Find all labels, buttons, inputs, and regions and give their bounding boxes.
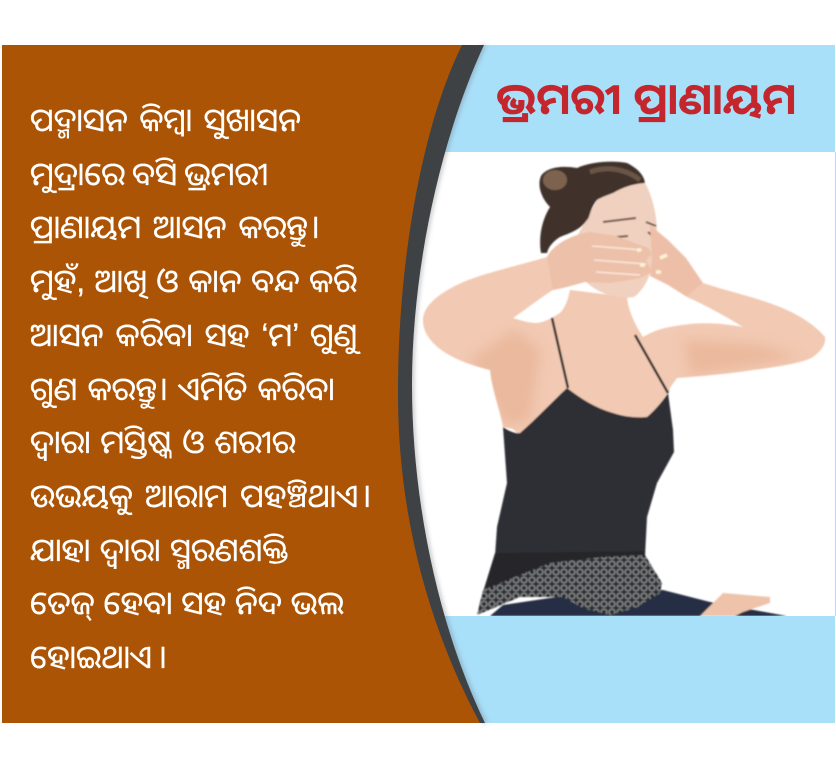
chest behind neckline <box>512 388 670 434</box>
curved dark stripe <box>300 45 485 723</box>
ring and nails <box>637 250 667 272</box>
body text: ପ୍ରାଣାୟମ ଆସନ କରନ୍ତୁ। <box>30 209 320 245</box>
navy leggings <box>490 590 787 616</box>
finger lines <box>592 246 646 275</box>
body text <box>30 102 371 675</box>
body text: ମୁଦ୍ରାରେ ବସି ଭ୍ରମରୀ <box>30 156 268 192</box>
straps <box>552 318 668 393</box>
body text: ଯାହା ଦ୍ୱାରା ସ୍ମରଣଶକ୍ତି <box>30 532 288 568</box>
right hand <box>650 225 703 297</box>
title band <box>400 45 835 152</box>
dark waist <box>483 551 645 592</box>
lace skirt <box>477 555 662 615</box>
body text: ପଦ୍ମାସନ କିମ୍ବା ସୁଖାସନ <box>30 102 301 138</box>
body text: ଆସନ କରିବା ସହ ‘ମ’ ଗୁଣୁ <box>30 317 357 353</box>
face <box>575 183 657 298</box>
left hand with fingers over face <box>547 232 652 290</box>
body text: ତେଜ୍ ହେବା ସହ ନିଦ ଭଲ <box>30 585 344 621</box>
brown text panel <box>2 45 480 723</box>
curved stripe shadow <box>412 45 485 723</box>
bottom band <box>400 616 835 723</box>
body skin: arms and chest <box>423 257 825 432</box>
body text: ଦ୍ୱାରା ମସ୍ତିଷ୍କ ଓ ଶରୀର <box>30 424 296 460</box>
body text: ଗୁଣ କରନ୍ତୁ। ଏମିତି କରିବା <box>30 371 335 407</box>
body text: ମୁହଁ, ଆଖି ଓ କାନ ବନ୍ଦ କରି <box>30 263 357 299</box>
body text: ଉଭୟକୁ ଆରାମ ପହଞ୍ଚିଥାଏ। <box>30 478 371 514</box>
hair and bun <box>539 162 645 253</box>
foot <box>700 593 770 616</box>
panel: right background <box>400 45 836 723</box>
body text: ହୋଇଥାଏ। <box>30 639 167 675</box>
photo: woman doing bhramari pranayama, covering eyes and ears <box>423 162 825 616</box>
soft body shading <box>470 330 800 425</box>
closed eyes and brows <box>603 218 656 238</box>
black tank top <box>495 388 674 556</box>
hair bun highlight <box>543 170 567 190</box>
title: ଭ୍ରମରୀ ପ୍ରାଣାୟମ <box>496 75 796 124</box>
